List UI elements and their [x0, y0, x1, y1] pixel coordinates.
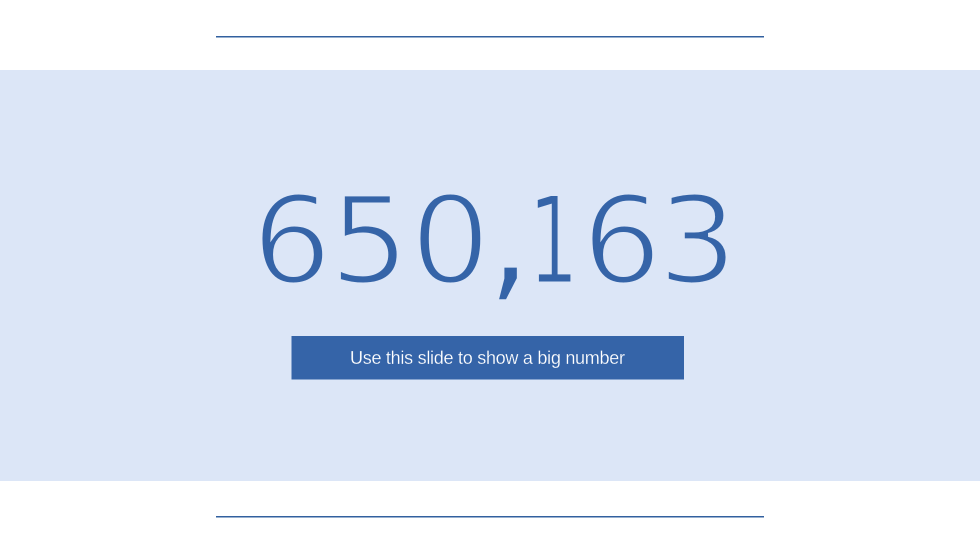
big number: , — [487, 155, 532, 318]
big number: 1 — [528, 172, 579, 313]
top rule — [216, 36, 764, 38]
label text: Use this slide to show a big number — [350, 348, 625, 368]
big number: 63 — [581, 172, 738, 312]
big number — [251, 155, 738, 318]
background band — [0, 70, 980, 481]
label bar — [292, 336, 684, 380]
bottom rule — [216, 516, 764, 518]
big number: 650 — [251, 172, 491, 312]
